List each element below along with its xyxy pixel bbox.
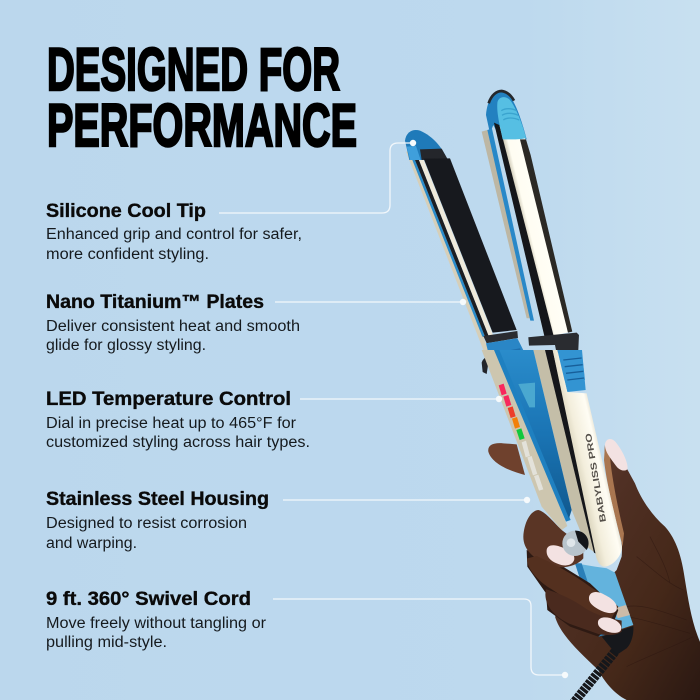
titanium plate: [424, 158, 517, 333]
engraved brand text: BABYLISS PRO: [583, 432, 608, 523]
title: [47, 36, 357, 159]
collar: [614, 605, 630, 618]
tip highlight: [407, 146, 421, 160]
left arm blue line: [494, 350, 571, 522]
chrome body: [495, 123, 572, 337]
title: DESIGNED FOR: [47, 36, 340, 103]
feature: silicone cool tip: more confident styling.: [46, 246, 209, 263]
callout line: cool tip: [219, 140, 416, 213]
callout line: housing: [283, 497, 530, 503]
black stripe: [494, 123, 554, 337]
black edge line: [415, 160, 489, 337]
grey side strip: [482, 130, 532, 318]
left arm blue panel: [499, 350, 572, 518]
finger shadow backing: [527, 550, 618, 637]
index finger: [523, 510, 583, 567]
feature: nano titanium plates: Deliver consistent heat and smooth: [46, 318, 300, 335]
feature: stainless steel housing: Designed to resist corrosion: [46, 515, 247, 532]
feature: nano titanium plates: glide for glossy styling.: [46, 337, 206, 354]
thumb nail: [605, 439, 628, 471]
middle finger: [527, 556, 618, 618]
feature: stainless steel housing: Stainless Steel Housing: [46, 489, 269, 510]
index nail: [547, 545, 574, 565]
feature: stainless steel housing: and warping.: [46, 535, 137, 552]
right arm blue grip: [557, 350, 586, 392]
feature: silicone cool tip: Silicone Cool Tip: [46, 201, 206, 222]
cord strain relief: [602, 626, 633, 655]
beige edge: [406, 152, 488, 350]
flat iron and hand illustration: [405, 90, 700, 700]
feature: swivel cord: [46, 589, 266, 651]
blue tip shell: [486, 90, 527, 141]
feature: silicone cool tip: [46, 201, 302, 263]
feature: swivel cord: 9 ft. 360° Swivel Cord: [46, 589, 251, 610]
feature: nano titanium plates: [46, 292, 300, 354]
feature: swivel cord: pulling mid-style.: [46, 634, 167, 651]
blue edge strip: [487, 129, 534, 321]
right arm black stripe: [545, 350, 598, 555]
feature: nano titanium plates: Nano Titanium™ Plates: [46, 292, 264, 313]
feature: led temperature control: [46, 389, 310, 451]
blue neck: [575, 563, 633, 637]
power cord: [573, 652, 615, 700]
lower iron body: [482, 350, 633, 700]
title: PERFORMANCE: [47, 92, 357, 159]
blue tip: [405, 130, 447, 160]
feature: stainless steel housing: [46, 489, 269, 552]
blue grip: [558, 352, 585, 380]
feature: led temperature control: customized styling across hair types.: [46, 434, 310, 451]
right arm chrome: [553, 350, 622, 567]
rubber band: [528, 333, 579, 353]
left arm beige housing: [482, 350, 567, 530]
feature: led temperature control: Dial in precise heat up to 465°F for: [46, 415, 296, 432]
blue edge line: [412, 160, 485, 337]
tip rim: [420, 149, 447, 160]
callout line: plates: [275, 299, 466, 305]
swivel dial: [562, 531, 589, 556]
feature: silicone cool tip: Enhanced grip and control for safer,: [46, 226, 302, 243]
upper right iron arm: [482, 90, 585, 380]
callout line: swivel cord: [273, 599, 568, 678]
LED indicators: [499, 384, 525, 440]
upper left iron arm: [405, 130, 538, 380]
silicone cool tip pad: [497, 97, 526, 139]
blue upper panel: [486, 338, 538, 380]
temperature button: [518, 383, 535, 407]
ring nail: [598, 617, 621, 633]
control buttons: [522, 441, 543, 491]
panel bump: [502, 348, 527, 368]
plate base band: [483, 331, 518, 343]
ring finger: [545, 589, 622, 635]
chrome inner strip: [419, 160, 494, 337]
hand: palm, thumb and back finger: [488, 443, 700, 700]
middle nail: [589, 592, 617, 613]
rubber band left: [482, 353, 497, 374]
feature: led temperature control: LED Temperature Control: [46, 389, 291, 410]
dark right stripe: [520, 139, 572, 333]
right arm grey strip: [533, 350, 597, 554]
callout line: temperature: [300, 396, 502, 402]
feature: swivel cord: Move freely without tangling or: [46, 615, 266, 632]
